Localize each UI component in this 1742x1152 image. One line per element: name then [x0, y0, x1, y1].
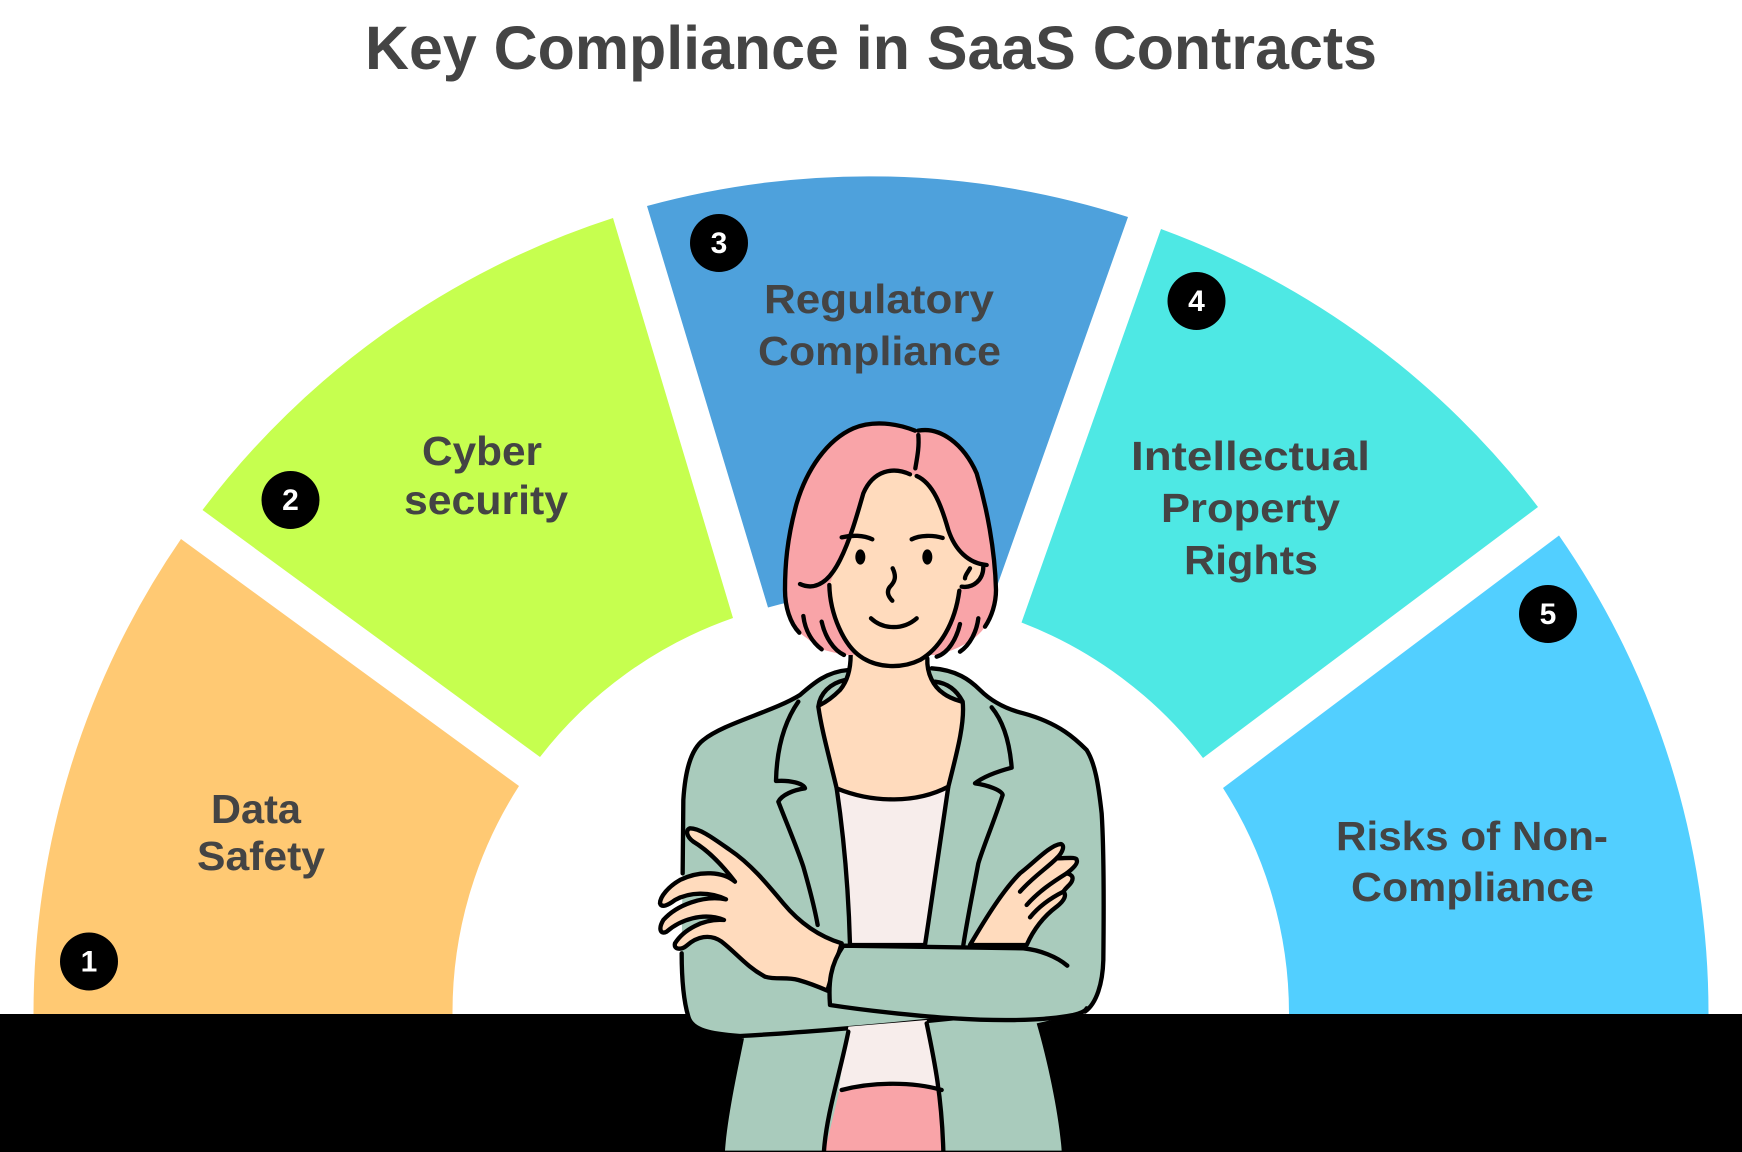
black floor band [0, 1014, 1742, 1152]
right lapel [963, 707, 1012, 945]
badge 4 [1168, 272, 1226, 330]
smile [871, 618, 917, 627]
label: Risks of Non-Compliance: Risks of Non- [1336, 813, 1608, 859]
sleeve lines [829, 946, 1087, 1020]
eyes [855, 549, 932, 565]
badge 5 [1519, 585, 1577, 643]
label: Intellectual Property Rights: Intellectual [1131, 433, 1370, 479]
segment 2: Cyber security [202, 218, 733, 757]
label: Cyber security [404, 428, 568, 523]
title: Key Compliance in SaaS Contracts [365, 14, 1377, 82]
nose [888, 568, 895, 601]
shirt upper [837, 787, 948, 945]
jacket outline right [932, 668, 1104, 1012]
badge 1 [60, 932, 118, 990]
label: Data Safety [197, 786, 325, 879]
hair [785, 423, 996, 655]
label: Intellectual Property Rights [1131, 433, 1370, 583]
lower left arm outline [682, 953, 953, 1036]
left hand [660, 828, 842, 991]
label: Risks of Non-Compliance [1336, 813, 1608, 910]
hands and sleeve [660, 828, 1087, 1021]
left lapel [776, 702, 818, 925]
segment 1: Data Safety [33, 539, 519, 1014]
badge 2: 2 [282, 484, 299, 517]
label: Regulatory Compliance: Compliance [758, 328, 1001, 374]
illustration: woman with crossed arms [660, 423, 1104, 1151]
label: Regulatory Compliance: Regulatory [764, 276, 994, 322]
jacket outline upper [683, 670, 848, 873]
label: Data Safety: Data [211, 786, 302, 832]
label: Regulatory Compliance [758, 276, 1001, 374]
shirt lower and skirt [824, 1020, 943, 1151]
label: Cyber security: security [404, 477, 568, 523]
badge 3 [690, 214, 748, 272]
label: Intellectual Property Rights: Rights [1184, 537, 1318, 583]
label: Data Safety: Safety [197, 833, 325, 879]
label: Cyber security: Cyber [422, 428, 542, 474]
face [829, 471, 983, 666]
jacket [682, 668, 1104, 1151]
badge 2 [262, 471, 320, 529]
crossed sleeve [829, 946, 1085, 1021]
label: Risks of Non-Compliance: Compliance [1351, 864, 1594, 910]
eyebrows [842, 536, 943, 539]
neck and collar lines [818, 655, 963, 788]
right hand finger lines [1020, 858, 1067, 917]
hair outline [785, 423, 996, 657]
badge 3: 3 [711, 227, 727, 260]
segment 4: Intellectual Property Rights [1022, 229, 1538, 758]
face lines [800, 471, 987, 666]
badge 5: 5 [1540, 598, 1556, 631]
right hand [970, 844, 1077, 945]
badge 4: 4 [1188, 285, 1205, 318]
label: Intellectual Property Rights: Property [1161, 485, 1340, 531]
segment 3: Regulatory Compliance [647, 176, 1128, 608]
segment 5: Risks of Non-Compliance [1223, 536, 1709, 1014]
badge 1: 1 [81, 946, 97, 978]
chest skin and neck [818, 633, 964, 799]
